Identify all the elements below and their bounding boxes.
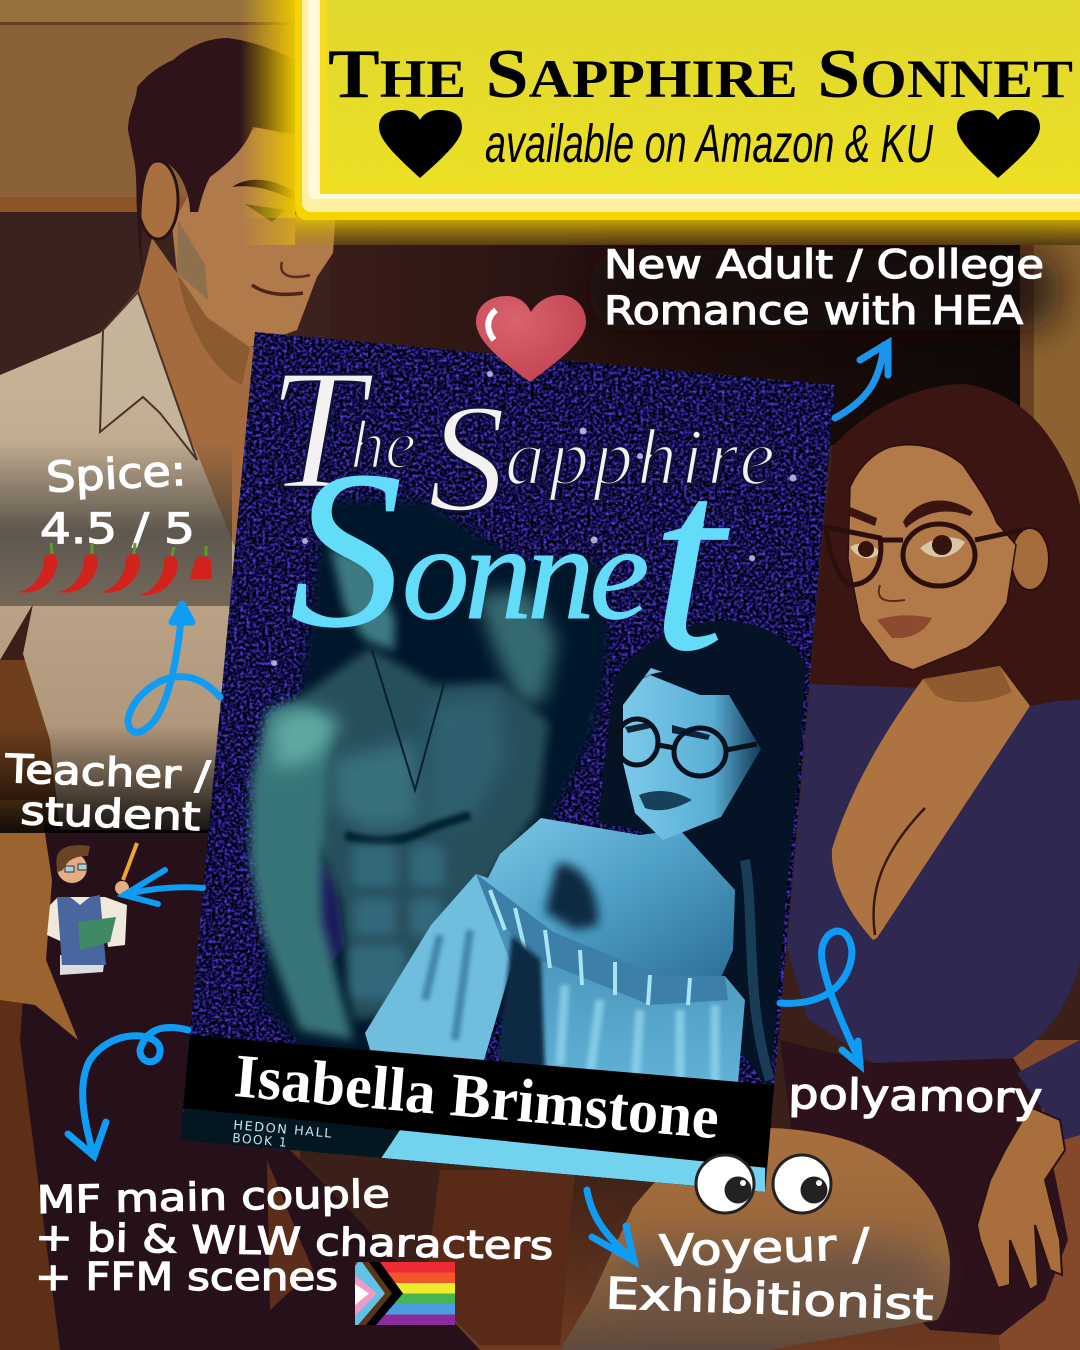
- cover author name: Isabella Brimstone: [232, 1042, 722, 1152]
- label: couple and characters: + bi & WLW characters: [35, 1215, 554, 1268]
- label: teacher student: [3, 747, 212, 840]
- man second limb: [476, 590, 557, 705]
- banner frame: [295, 0, 1080, 220]
- woman blouse folds: [560, 985, 715, 1090]
- label: voyeur exhibitionist: Voyeur /: [659, 1220, 871, 1277]
- banner lower glow: [295, 215, 1080, 245]
- man chest: [332, 740, 420, 830]
- icon: teacher: [47, 843, 137, 975]
- label: couple and characters: + FFM scenes: [35, 1255, 338, 1299]
- man shoulder highlight: [272, 710, 340, 770]
- cover glitter background: [170, 320, 850, 1200]
- man mouth: [252, 285, 303, 294]
- woman lips: [639, 791, 692, 810]
- label: genre: New Adult / College: [604, 243, 1044, 288]
- man hair: [128, 38, 300, 275]
- teacher book: [78, 917, 116, 950]
- arrow: couple: [68, 1027, 188, 1156]
- woman chest: [832, 666, 1030, 940]
- man abs: [350, 845, 445, 1000]
- arrow: polyamory: [780, 931, 860, 1065]
- man arm: [250, 704, 353, 1040]
- banner left glow: [240, 0, 295, 218]
- woman hair: [598, 621, 806, 1090]
- woman ruffle: [476, 874, 728, 1005]
- woman cardigan sleeve: [1017, 1040, 1080, 1140]
- label: voyeur exhibitionist: Exhibitionist: [605, 1269, 934, 1330]
- cover title Sonnet: t: [652, 417, 733, 705]
- teacher shirt: [47, 897, 127, 950]
- man nose: [281, 262, 310, 277]
- arrow: genre: [835, 343, 888, 418]
- man face: [172, 127, 340, 347]
- man trousers: [20, 825, 480, 1350]
- illustration: man behind the book: [0, 38, 575, 1350]
- woman eyes: [850, 537, 965, 558]
- cover series: HEDON HALL: [233, 1117, 334, 1141]
- woman neck shadow: [923, 666, 1012, 702]
- cover title The Sapphire: T: [268, 335, 374, 525]
- top banner: [240, 0, 1080, 245]
- icon: red heart: [476, 295, 586, 382]
- label: polyamory: polyamory: [788, 1069, 1043, 1122]
- woman brows: [625, 722, 710, 740]
- woman nose: [879, 585, 905, 601]
- cover title Sonnet: S: [290, 424, 402, 674]
- teacher head: [57, 853, 87, 883]
- woman hair back: [810, 384, 1080, 790]
- arrow: teacher: [124, 870, 203, 904]
- label: spice: 4.5 / 5: [40, 504, 195, 553]
- man torso: [268, 648, 549, 1020]
- cover author band: [183, 1035, 775, 1168]
- label: genre: [604, 243, 1044, 334]
- teacher vest: [57, 895, 106, 965]
- man left arm and hand: [0, 800, 78, 1040]
- man shirt: [0, 290, 250, 830]
- label: genre: Romance with HEA: [604, 289, 1023, 334]
- icon: chilli rating: [18, 543, 212, 595]
- banner title: THE SAPPHIRE SONNET: [328, 36, 1073, 113]
- woman sleeve: [365, 874, 512, 1060]
- woman cleavage line: [873, 808, 925, 935]
- icon: progress pride flag: [355, 1262, 455, 1325]
- label: couple and characters: [35, 1172, 554, 1299]
- woman brows: [845, 501, 973, 528]
- man necklace: [372, 650, 445, 790]
- cover lower dark area: [180, 1100, 770, 1192]
- arrow: voyeur: [587, 1190, 634, 1261]
- woman glasses: [826, 524, 1022, 586]
- label: spice: [40, 446, 195, 553]
- cover sparkle dots: [271, 371, 796, 721]
- cover man figure: [250, 500, 610, 1060]
- woman cardigan: [787, 684, 1080, 1063]
- woman glasses: [610, 719, 757, 776]
- man face: [330, 547, 395, 651]
- woman thigh: [560, 1128, 950, 1350]
- label: spice: Spice:: [45, 446, 187, 502]
- banner right heart: [957, 110, 1040, 178]
- label: couple and characters: MF main couple: [36, 1172, 390, 1222]
- cover title The Sapphire: apphire: [505, 414, 779, 502]
- woman face: [848, 445, 1016, 670]
- banner panel: [327, 0, 1080, 189]
- teacher glasses: [65, 864, 87, 872]
- woman lips: [877, 615, 932, 638]
- label: teacher student: student: [20, 789, 201, 840]
- man collar: [100, 292, 197, 460]
- cover title The Sapphire: S: [428, 372, 506, 544]
- man eye: [245, 204, 285, 222]
- woman hair strands: [640, 672, 730, 695]
- woman bare shoulder and chest: [476, 818, 735, 980]
- woman blouse shadow: [498, 935, 545, 1070]
- teacher pointer: [123, 843, 137, 880]
- woman hand: [977, 1107, 1065, 1290]
- woman skirt: [780, 1040, 1068, 1335]
- book cover: [170, 320, 850, 1200]
- teacher trousers: [60, 955, 105, 975]
- man ear: [138, 161, 178, 239]
- banner corner glow: [240, 218, 295, 245]
- man cheek shadow: [177, 220, 208, 300]
- woman ear: [1011, 528, 1049, 590]
- man eyebrow: [232, 180, 300, 202]
- arrow: spice: [128, 604, 220, 732]
- icon: googly eyes: [696, 1155, 831, 1213]
- man glitter gap: [315, 860, 345, 965]
- label: teacher student: Teacher /: [3, 747, 212, 799]
- cover book number: BOOK 1: [232, 1130, 289, 1150]
- man chest shadow line: [345, 815, 470, 841]
- woman blouse: [476, 874, 745, 1095]
- illustration: woman on the right: [560, 384, 1080, 1350]
- man neck and chest: [133, 238, 265, 560]
- woman face: [623, 668, 761, 840]
- cover woman figure: [365, 621, 806, 1095]
- label: voyeur exhibitionist: [605, 1220, 934, 1330]
- cover open book: [378, 1130, 765, 1192]
- cover title The Sapphire: he: [350, 407, 434, 484]
- woman shoulder shadow: [545, 864, 598, 930]
- cover title Sonnet: onne: [402, 499, 646, 648]
- dark text halos: [0, 250, 1060, 1310]
- man dark silhouette: [260, 500, 610, 1060]
- banner left heart: [379, 110, 462, 178]
